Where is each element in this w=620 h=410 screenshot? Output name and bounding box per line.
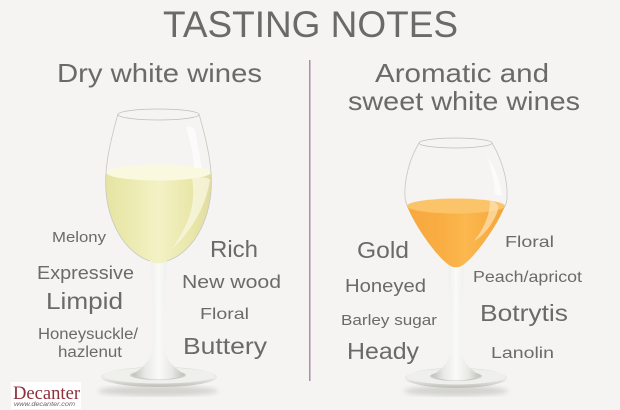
dry white tasting notes: Melony xyxy=(52,229,107,246)
divider xyxy=(309,60,310,381)
heading: dry white wines: Dry white wines xyxy=(57,58,262,88)
dry white tasting notes: hazlenut xyxy=(58,344,123,361)
dry white tasting notes: Floral xyxy=(200,306,249,323)
dry white tasting notes: Expressive xyxy=(37,263,134,283)
dry white tasting notes: Honeysuckle/ xyxy=(38,326,139,343)
icon: white wine glass xyxy=(98,109,218,396)
dry white tasting notes: Buttery xyxy=(183,333,268,359)
aromatic and sweet tasting notes: Gold xyxy=(357,237,409,263)
aromatic and sweet tasting notes: Peach/apricot xyxy=(473,269,583,286)
dry white tasting notes: New wood xyxy=(182,272,281,292)
aromatic and sweet tasting notes: Heady xyxy=(347,338,420,364)
heading: aromatic and sweet white wines xyxy=(348,58,580,116)
heading: aromatic and sweet white wines: sweet white wines xyxy=(348,86,580,116)
heading: aromatic and sweet white wines: Aromatic and xyxy=(375,58,549,88)
dry white tasting notes xyxy=(37,229,281,361)
aromatic and sweet tasting notes: Barley sugar xyxy=(341,312,437,329)
aromatic and sweet tasting notes: Botrytis xyxy=(480,300,568,326)
aromatic and sweet tasting notes: Lanolin xyxy=(491,345,554,362)
dry white tasting notes: Limpid xyxy=(46,288,123,314)
aromatic and sweet tasting notes xyxy=(341,234,583,364)
aromatic and sweet tasting notes: Floral xyxy=(505,234,554,251)
title: TASTING NOTES xyxy=(163,4,458,45)
icon: amber wine glass xyxy=(404,138,508,396)
logo: Decanter: www.decanter.com xyxy=(14,401,76,408)
aromatic and sweet tasting notes: Honeyed xyxy=(345,276,426,296)
dry white tasting notes: Rich xyxy=(210,236,258,262)
logo: Decanter: Decanter xyxy=(13,383,81,404)
